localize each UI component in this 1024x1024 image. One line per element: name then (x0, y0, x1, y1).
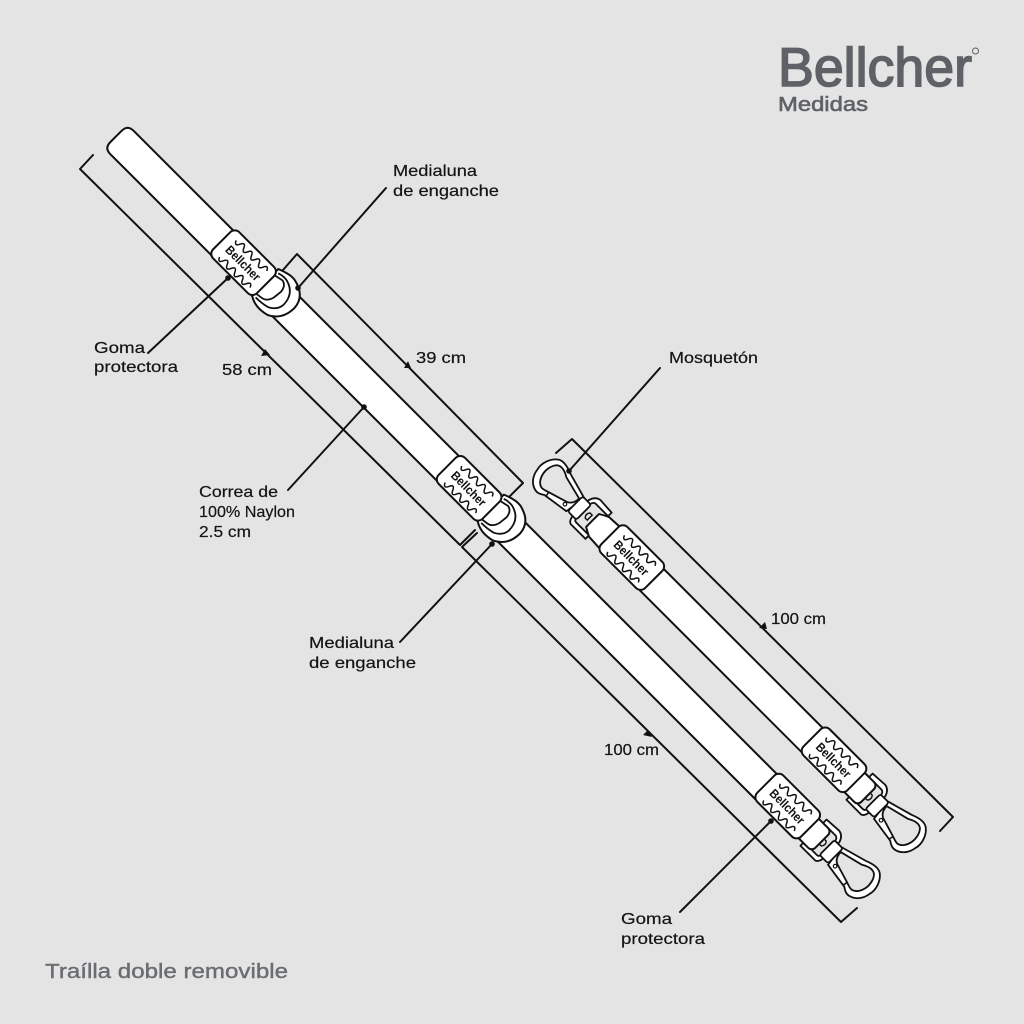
label: Medialuna de enganche lower: Medialuna (309, 635, 394, 652)
label: Goma protectora upper: protectora (94, 359, 178, 376)
rubber upper: Bellcher (222, 243, 263, 284)
leader: Mosqueton (566, 368, 660, 474)
label: Correa de 100% Naylon 2.5 cm (199, 484, 295, 541)
dimension label: 58 cm: 58 cm (222, 362, 272, 379)
label: Goma protectora upper: Goma (94, 340, 145, 357)
label: Goma protectora upper (94, 340, 178, 376)
logo: Bellcher Medidas: Medidas (778, 93, 868, 116)
strap band right (633, 561, 829, 757)
footer caption: Traílla doble removible (45, 961, 288, 983)
rubber upper right: Bellcher (611, 538, 652, 579)
swivel snap hook lower left (800, 818, 887, 906)
dimension label: 100 cm right: 100 cm (771, 611, 826, 628)
leader: Medialuna lower (400, 541, 495, 642)
left long strap with two rubbers and two D-rings (102, 119, 890, 907)
label: Goma protectora lower: Goma (621, 911, 672, 928)
tab upper (582, 510, 623, 551)
label: Goma protectora lower: protectora (621, 931, 705, 948)
label: Medialuna de enganche upper (393, 163, 499, 200)
label: Correa de 100% Naylon 2.5 cm: 100% Naylon (199, 504, 295, 521)
label: Medialuna de enganche lower (309, 635, 416, 672)
rubber upper right (597, 523, 667, 593)
rubber lower right (799, 725, 869, 795)
dimension label: 100 cm left: 100 cm (604, 742, 659, 759)
label: Correa de 100% Naylon 2.5 cm: Correa de (199, 484, 278, 501)
rubber middle (434, 453, 504, 523)
rubber lower left: Bellcher (767, 786, 808, 827)
dimension line: 100 cm left strap (462, 533, 857, 922)
label: Medialuna de enganche upper: de enganche (393, 183, 499, 200)
rubber upper (209, 228, 279, 298)
leader: Correa (288, 404, 367, 490)
dimension line: 39 cm (283, 254, 523, 498)
rubber lower right: Bellcher (813, 740, 854, 781)
label: Medialuna de enganche upper: Medialuna (393, 163, 477, 180)
rubber middle: Bellcher (448, 468, 489, 510)
snap hook upper (525, 452, 613, 540)
dimension label: 39 cm: 39 cm (416, 350, 466, 367)
label: Correa de 100% Naylon 2.5 cm: 2.5 cm (199, 524, 251, 541)
leader: Goma protectora upper (148, 275, 231, 353)
strap band (104, 125, 779, 800)
rubber lower left (753, 771, 823, 841)
leader: Goma protectora lower (680, 818, 774, 912)
dimension line: 58 cm (80, 155, 475, 545)
D-ring upper (249, 266, 309, 326)
dimension line: 100 cm right strap (556, 439, 953, 831)
label: Mosqueton: Mosquetón (669, 350, 758, 367)
D-ring middle (475, 492, 534, 552)
snap hook lower right (846, 773, 933, 860)
leader: Medialuna upper (295, 188, 386, 291)
logo: Bellcher Medidas: Bellcher (778, 36, 972, 98)
tab lower right (839, 767, 878, 805)
right strap with rubbers and snap hooks (525, 452, 933, 860)
end tab lower left (793, 813, 832, 851)
label: Medialuna de enganche lower: de enganche (309, 655, 416, 672)
label: Goma protectora lower (621, 911, 705, 948)
